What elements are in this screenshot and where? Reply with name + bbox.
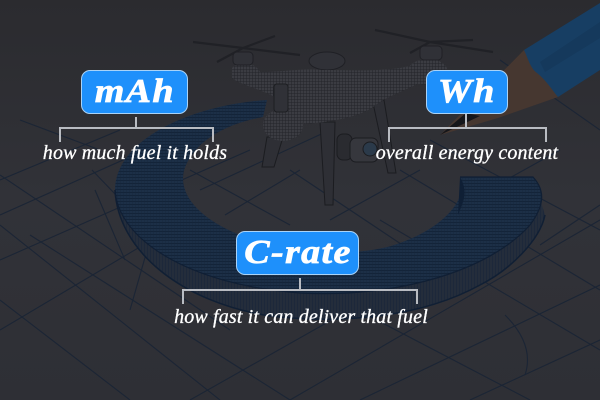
C-rate bracket — [182, 278, 418, 304]
label group: mAh — [43, 70, 227, 164]
mAh bracket — [59, 117, 214, 142]
Wh badge — [426, 70, 508, 114]
C-rate badge: C-rate — [244, 234, 351, 271]
C-rate caption: how fast it can deliver that fuel — [174, 306, 428, 328]
Wh bracket — [388, 114, 547, 142]
label group: Wh — [376, 70, 559, 164]
drone — [193, 30, 493, 205]
mAh badge — [81, 70, 188, 114]
label group: C-rate — [174, 231, 428, 328]
Wh caption: overall energy content — [376, 142, 558, 164]
ring — [115, 100, 545, 319]
mAh badge: mAh — [94, 73, 175, 110]
mAh caption: how much fuel it holds — [43, 142, 227, 164]
pencil — [440, 3, 600, 135]
Wh badge: Wh — [438, 73, 496, 110]
